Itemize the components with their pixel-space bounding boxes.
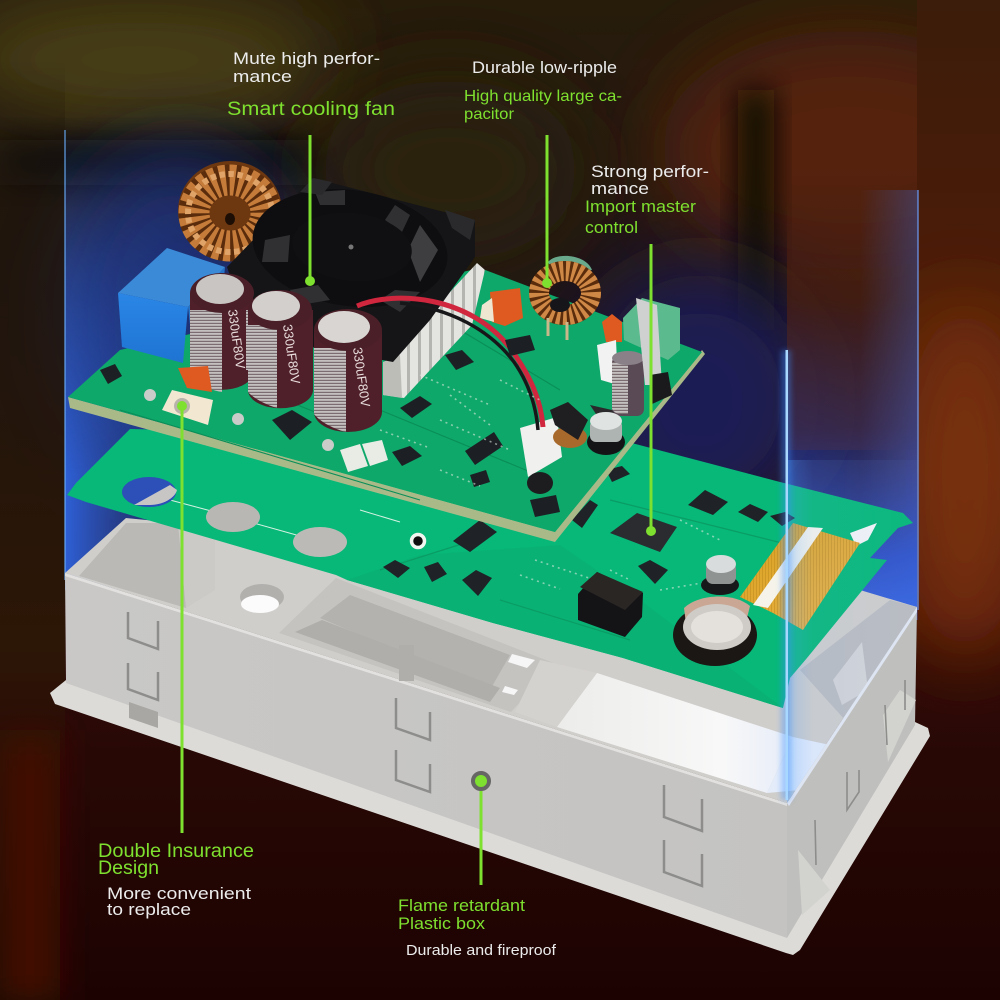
capacitor 1: 330uF80V [225, 308, 248, 370]
white connectors [162, 298, 618, 477]
aluminium capacitor [701, 555, 739, 595]
small toroid [539, 256, 592, 340]
capacitor 3: 330uF80V [350, 346, 373, 408]
large capacitors [190, 273, 382, 432]
upper PCB [68, 161, 705, 542]
text: double insurance: to replace [107, 900, 191, 919]
text: flame retardant [398, 896, 557, 959]
text: flame retardant: Durable and fireproof [406, 942, 557, 959]
text: double insurance [98, 841, 254, 919]
text: large capacitor: Durable low-ripple [472, 58, 617, 77]
box flange [50, 680, 930, 955]
box ribbed tray [279, 578, 556, 712]
text: smart cooling fan: Mute high perfor- [233, 49, 380, 68]
lower PCB outline [67, 429, 913, 708]
inductors [527, 402, 625, 494]
text: master control [585, 162, 709, 237]
box inner floor [65, 518, 917, 803]
upper PCB surface [68, 268, 702, 532]
capacitor 1 [190, 273, 254, 392]
right capacitor [612, 351, 644, 416]
box right interior [800, 600, 917, 720]
chips [383, 466, 795, 596]
text: double insurance: Double Insurance [98, 841, 254, 862]
text: master control: Import master [585, 197, 696, 216]
capacitor 3 [314, 309, 382, 432]
upper PCB edge [68, 350, 705, 542]
blue light columns [64, 130, 919, 620]
capacitor 2 [248, 290, 313, 408]
coin cell [673, 596, 757, 666]
callout lines [177, 135, 656, 885]
text: smart cooling fan: mance [233, 67, 292, 86]
box front face [65, 573, 787, 938]
text: large capacitor [464, 58, 622, 123]
text: master control: Strong perfor- [591, 162, 709, 181]
MCU chip [610, 513, 677, 552]
capacitor 2: 330uF80V [280, 323, 303, 385]
text: master control: control [585, 218, 638, 237]
text: flame retardant: Plastic box [398, 914, 486, 933]
text: master control: mance [591, 179, 649, 198]
text: double insurance: Design [98, 858, 159, 879]
text: smart cooling fan: Smart cooling fan [227, 99, 395, 120]
screws and pads [144, 389, 388, 472]
terminal block [623, 298, 680, 404]
heat sink [383, 263, 485, 398]
lower PCB [67, 429, 913, 708]
mounting holes [122, 477, 424, 557]
orange capacitors [178, 288, 622, 392]
plastic box [50, 518, 930, 955]
text: double insurance: More convenient [107, 884, 251, 903]
box slots [128, 612, 702, 886]
text: large capacitor: High quality large ca- [464, 88, 622, 105]
toroid inductor left [178, 161, 282, 261]
box window [515, 660, 597, 727]
relay [118, 248, 225, 363]
pin header [578, 572, 643, 637]
text: large capacitor: pacitor [464, 106, 515, 123]
red black wires [357, 298, 543, 430]
white slot [850, 523, 877, 546]
text: smart cooling fan [227, 49, 395, 120]
fan [227, 177, 475, 362]
box left inner wall [79, 523, 186, 608]
box right side [787, 607, 917, 938]
glass panel overlay [781, 350, 917, 803]
yellow ribbon cable [740, 523, 860, 630]
text: flame retardant: Flame retardant [398, 896, 525, 915]
ICs [100, 335, 560, 517]
